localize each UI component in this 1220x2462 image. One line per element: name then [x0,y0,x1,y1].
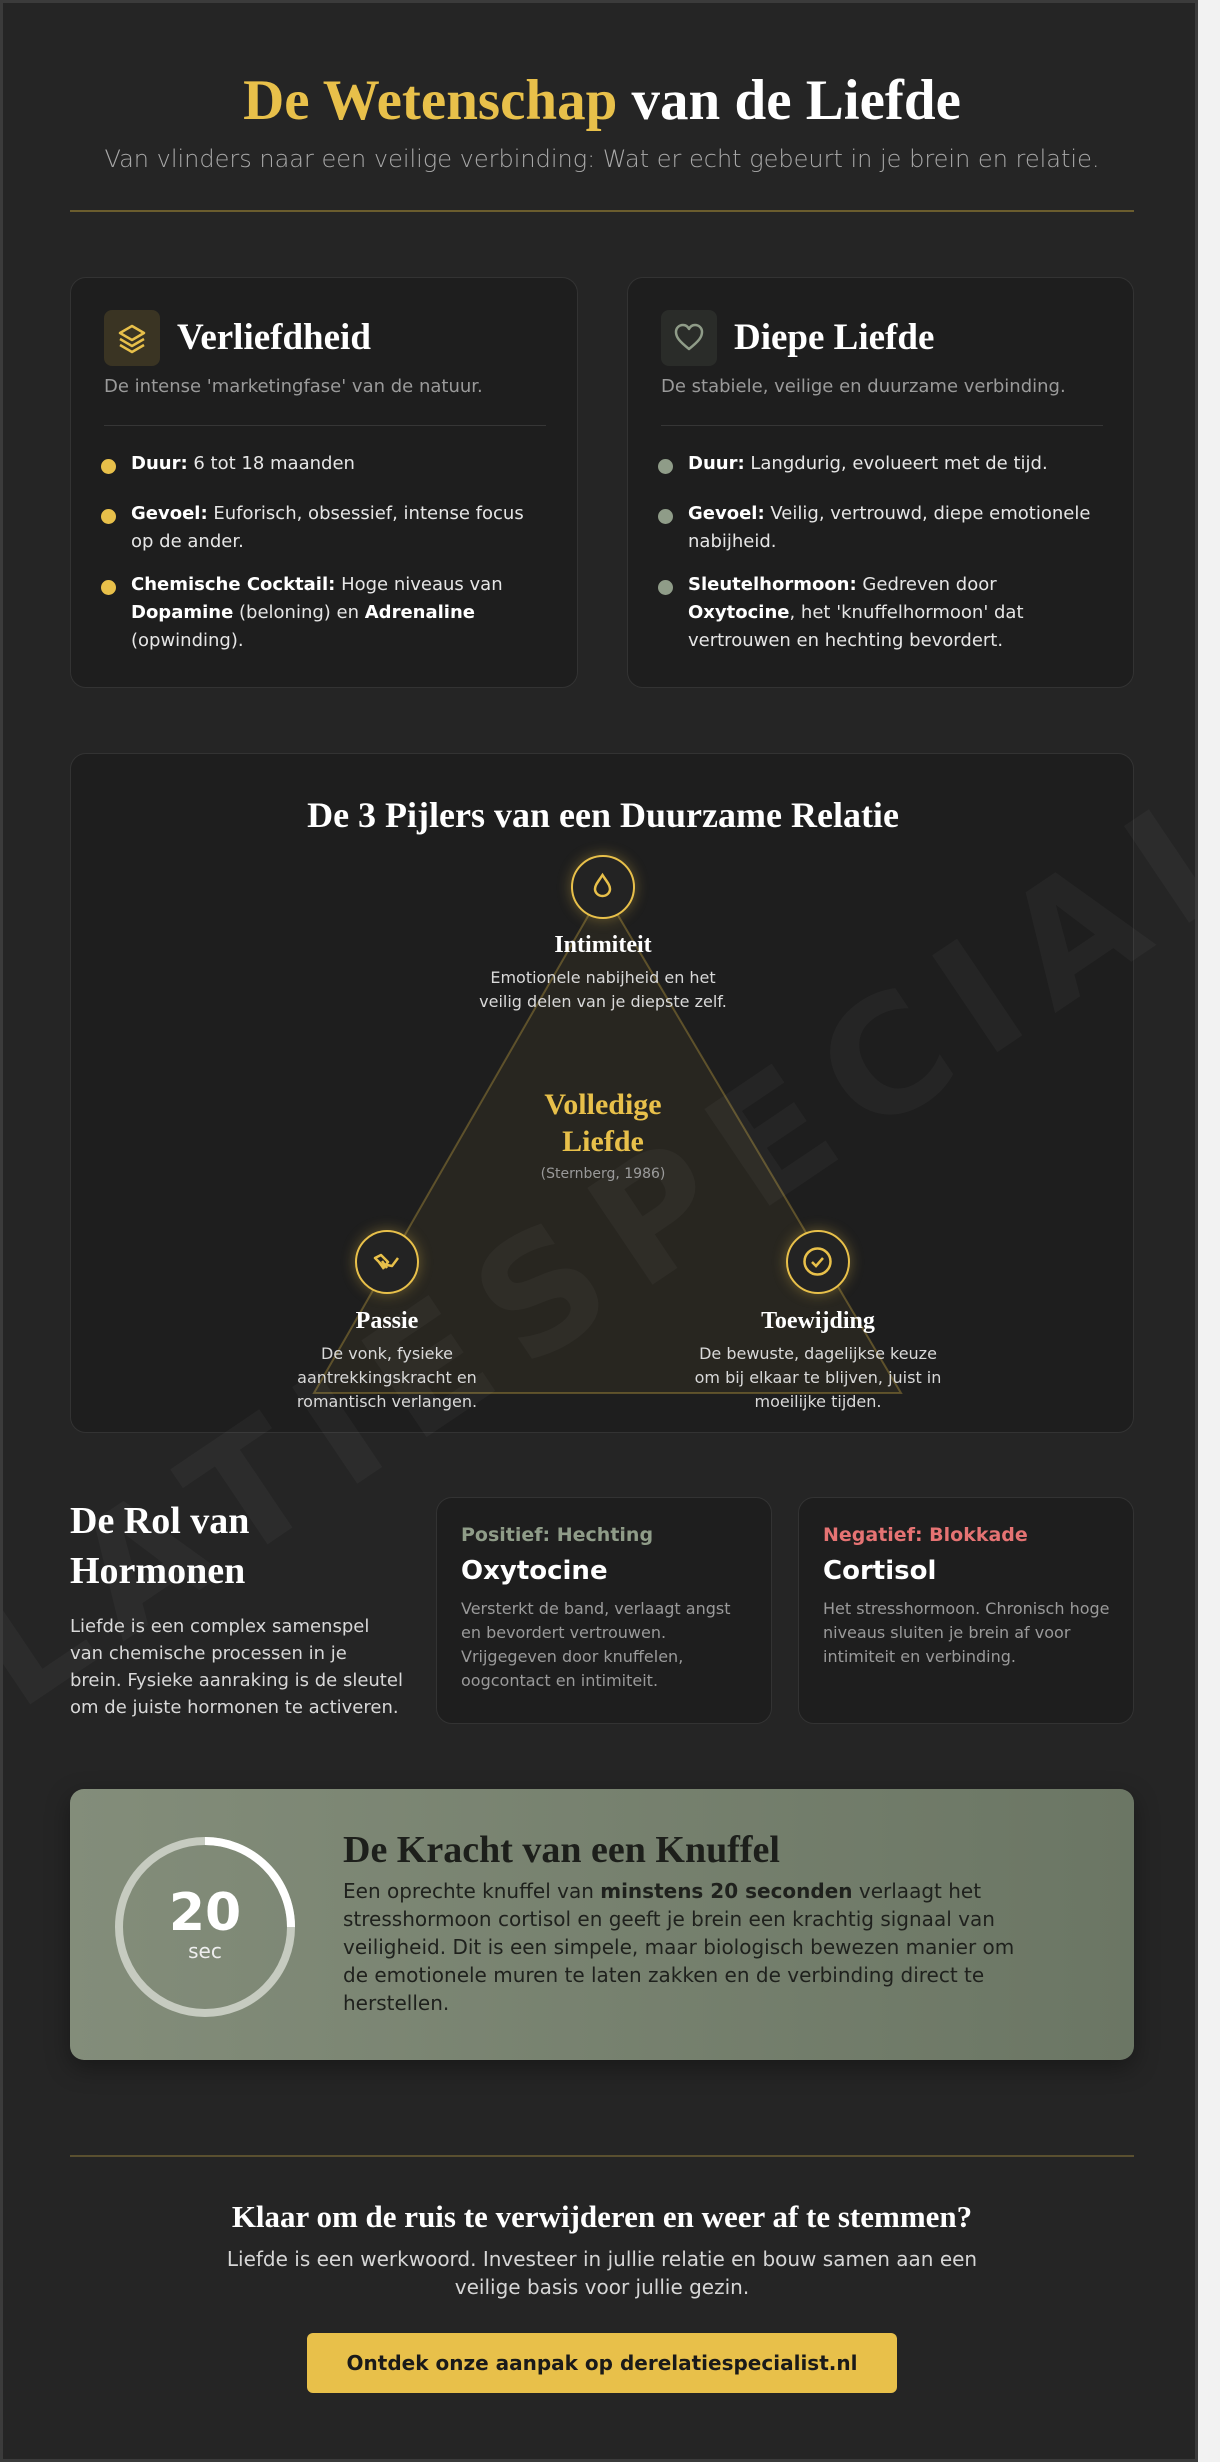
pillar: intimiteit [479,932,727,1011]
cta button: Ontdek onze aanpak op derelatiespecialist.nl [347,2351,857,2375]
panel: pillars [70,753,1134,1433]
card: cortisol: Negatief: Blokkade [823,1524,1028,1546]
card: oxytocine: Positief: Hechting [461,1524,653,1546]
icon: passie [355,1230,419,1294]
icon: toewijding [786,1230,850,1294]
bullet list: Gevoel: Euforisch, obsessief, intense focus op de ander. [131,503,524,552]
icon: timer ring: sec [188,1939,222,1963]
pillar: intimiteit: veilig delen van je diepste zelf. [479,992,727,1011]
panel: knuffel [70,1789,1134,2060]
cta text: Liefde is een werkwoord. Investeer in jullie relatie en bouw samen aan een veilige basis voor jullie gezin. [227,2247,977,2299]
icon: timer ring: 20 [169,1883,241,1943]
heading: Diepe Liefde [734,317,934,358]
knuffel text: Een oprechte knuffel van minstens 20 seconden verlaagt het stresshormoon cortisol en geeft je brein een krachtig signaal van veiligheid. Dit is een simpele, maar biologisch bewezen manier om de emotionele muren te laten zakken en de verbinding direct te herstellen. [343,1879,1014,2015]
card: cortisol [798,1497,1134,1724]
center label: Volledige [544,1088,662,1121]
triangle [312,915,903,1394]
pillars title: De 3 Pijlers van een Duurzame Relatie [307,795,899,835]
heading: Verliefdheid [177,317,371,358]
card: cortisol: Het stresshormoon. Chronisch hoge niveaus sluiten je brein af voor intimiteit en verbinding. [823,1599,1110,1666]
center label: (Sternberg, 1986) [541,1166,665,1182]
pillar: passie [297,1308,477,1411]
subtitle: Van vlinders naar een veilige verbinding: Wat er echt gebeurt in je brein en relatie. [105,145,1099,173]
bullet list: Sleutelhormoon: Gedreven door Oxytocine, het 'knuffelhormoon' dat vertrouwen en hechting bevordert. [688,574,1024,651]
card subtitle: De stabiele, veilige en duurzame verbinding. [661,376,1066,397]
panel: verliefdheid [70,277,578,688]
cta button [307,2333,897,2393]
card: cortisol: Cortisol [823,1556,936,1586]
center label: Liefde [562,1125,644,1158]
hormones text: om de juiste hormonen te activeren. [70,1697,399,1718]
hormones text: brein. Fysieke aanraking is de sleutel [70,1670,403,1691]
cta heading: Klaar om de ruis te verwijderen en weer af te stemmen? [232,2199,972,2234]
bullet list: Gevoel: Veilig, vertrouwd, diepe emotionele nabijheid. [688,503,1090,552]
icon: timer ring [115,1837,295,2017]
pillar: toewijding [695,1308,941,1411]
card: oxytocine: Oxytocine [461,1556,608,1586]
pillar: toewijding: Toewijding [761,1308,875,1334]
title: De Wetenschap van de Liefde [243,69,961,132]
hormones heading: Hormonen [70,1550,245,1592]
center label [541,1088,665,1182]
pillar: toewijding: De bewuste, dagelijkse keuze om bij elkaar te blijven, juist in moeilijke tijden. [695,1344,941,1411]
card subtitle: De intense 'marketingfase' van de natuur. [104,376,483,397]
card: oxytocine [436,1497,772,1724]
hormones heading: De Rol van [70,1500,249,1542]
icon: heart [661,310,717,366]
panel: diepe liefde [627,277,1134,688]
bullet list: Chemische Cocktail: Hoge niveaus van Dopamine (beloning) en Adrenaline (opwinding). [131,574,503,651]
icon: intimiteit [571,855,635,919]
pillar: passie: Passie [356,1308,418,1334]
bullet list: Duur: 6 tot 18 maanden [131,453,355,474]
pillar: passie: De vonk, fysieke aantrekkingskracht en romantisch verlangen. [297,1344,477,1411]
bullet list [658,453,1090,651]
bullet list [101,453,524,651]
hormones text: van chemische processen in je [70,1643,347,1664]
icon: layers [104,310,160,366]
knuffel heading: De Kracht van een Knuffel [343,1829,780,1871]
bullet list: Duur: Langdurig, evolueert met de tijd. [688,453,1048,474]
card: oxytocine: Versterkt de band, verlaagt angst en bevordert vertrouwen. Vrijgegeven door knuffelen, oogcontact en intimiteit. [461,1599,730,1690]
hormones text: Liefde is een complex samenspel [70,1616,369,1637]
hormones text [70,1616,403,1718]
hormones heading [70,1500,249,1592]
pillar: intimiteit: Emotionele nabijheid en het [490,968,716,987]
pillar: intimiteit: Intimiteit [554,932,652,958]
